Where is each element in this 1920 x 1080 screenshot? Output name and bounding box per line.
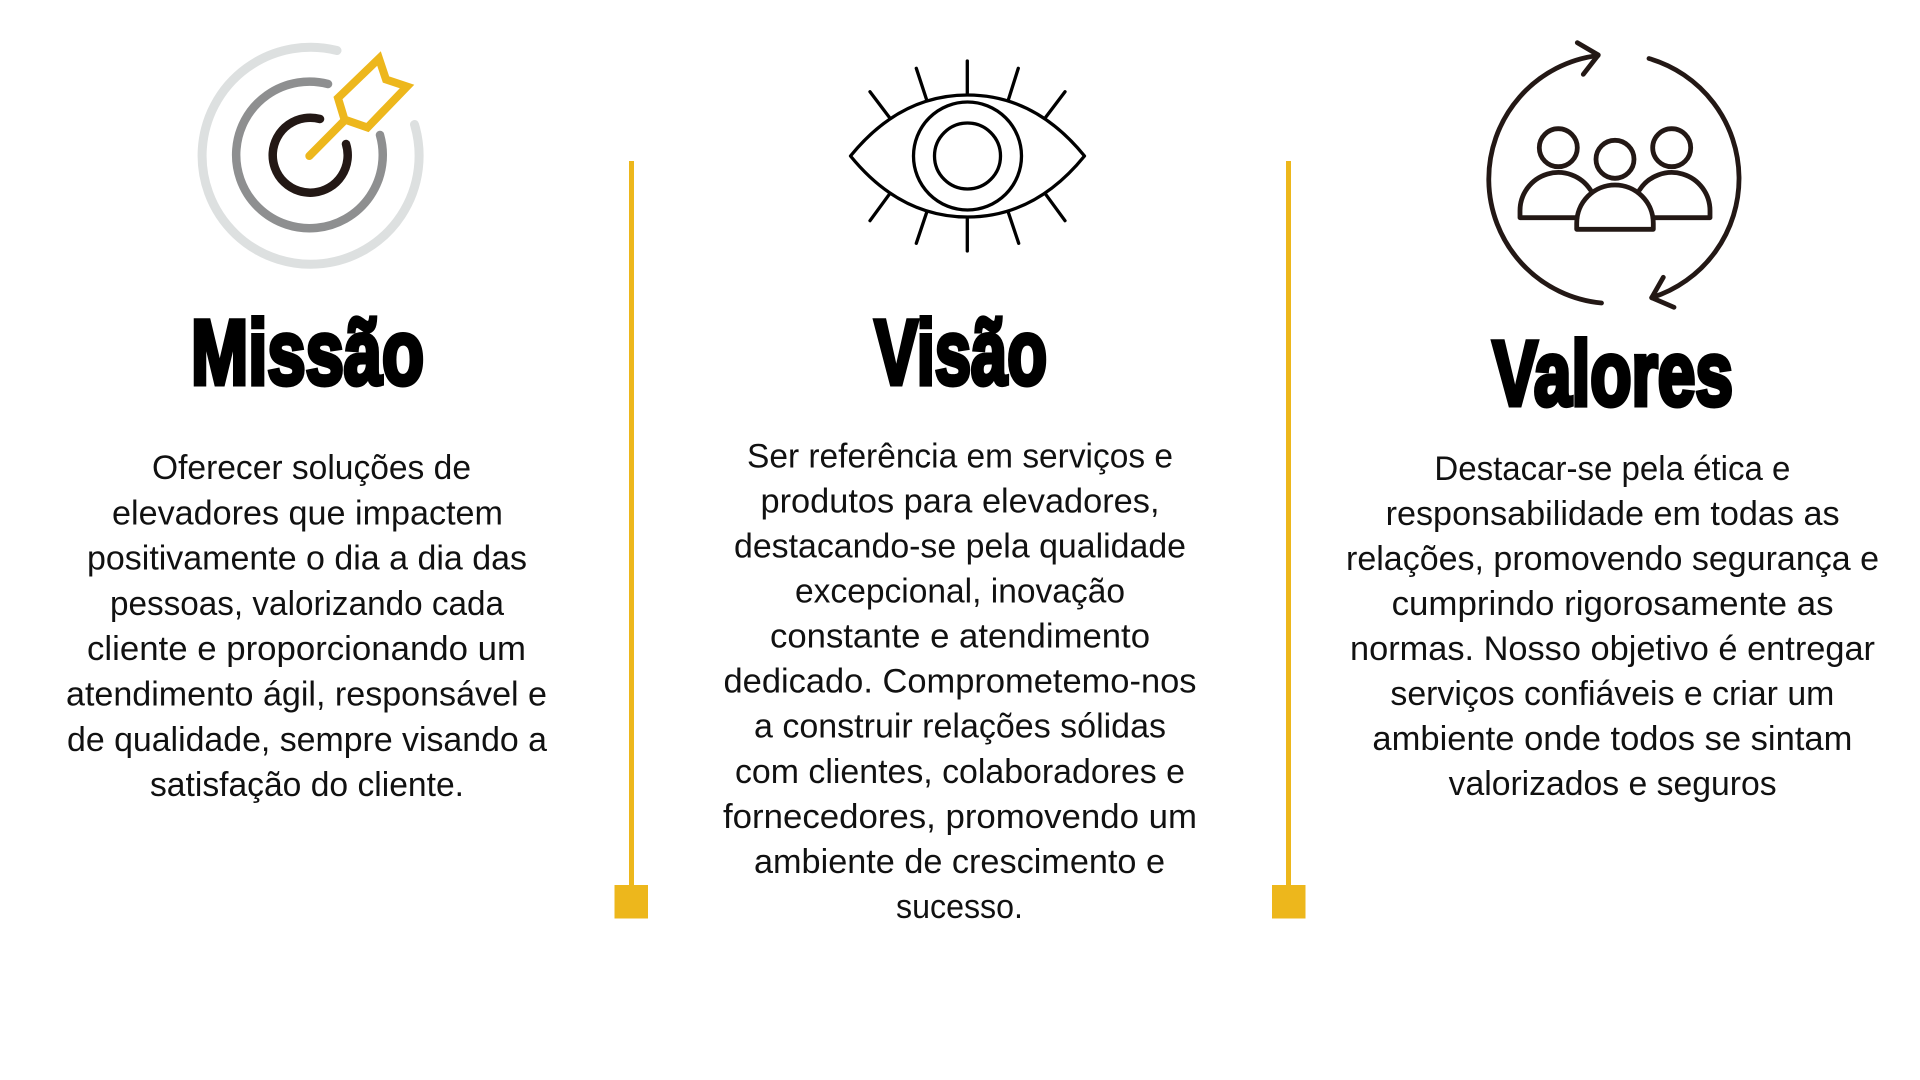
text block: Missão description: de qualidade, sempre visando a [67, 721, 547, 759]
icon: team with cycle arrows [1489, 43, 1739, 307]
text block: Missão description [66, 449, 547, 804]
text block: Valores description: serviços confiáveis e criar um [1390, 675, 1834, 713]
text block: Valores description: relações, promovendo segurança e [1346, 540, 1879, 578]
text block: Missão description: atendimento ágil, responsável e [66, 676, 547, 714]
panel: Missão [66, 47, 547, 804]
text block: Valores description: valorizados e seguros [1449, 765, 1777, 803]
heading: Visão: Visão [874, 302, 1047, 404]
divider: right line with square [1272, 161, 1306, 918]
text block: Visão description: destacando-se pela qualidade [734, 527, 1186, 565]
text block: Missão description: elevadores que impactem [112, 494, 503, 532]
heading: Valores: Valores [1492, 323, 1733, 425]
divider: left line with square [614, 161, 648, 918]
text block: Valores description: normas. Nosso objetivo é entregar [1350, 630, 1875, 668]
text block: Visão description: sucesso. [896, 888, 1023, 926]
text block: Visão description [723, 437, 1197, 926]
panel: Visão [723, 61, 1197, 926]
panel: Valores [1346, 43, 1879, 803]
text block: Visão description: a construir relações sólidas [754, 708, 1166, 746]
text block: Visão description: excepcional, inovação [795, 572, 1125, 610]
text block: Visão description: constante e atendimento [770, 618, 1150, 656]
text block: Visão description: produtos para elevadores, [760, 482, 1160, 520]
text block: Valores description: responsabilidade em todas as [1386, 495, 1840, 533]
text block: Missão description: positivamente o dia a dia das [87, 540, 527, 578]
text block: Missão description: Oferecer soluções de [152, 449, 471, 487]
text block: Missão description: cliente e proporcionando um [87, 630, 526, 668]
text block: Visão description: dedicado. Comprometemo-nos [724, 663, 1196, 701]
text block: Valores description: cumprindo rigorosamente as [1392, 585, 1834, 623]
heading: Missão: Missão [191, 302, 424, 404]
text block: Valores description [1346, 450, 1879, 803]
text block: Visão description: fornecedores, promovendo um [723, 798, 1197, 836]
text block: Valores description: Destacar-se pela ética e [1434, 450, 1790, 488]
text block: Visão description: ambiente de crescimento e [754, 843, 1165, 881]
text block: Valores description: ambiente onde todos se sintam [1372, 720, 1852, 758]
icon: target with dart [202, 47, 419, 264]
text block: Visão description: Ser referência em serviços e [747, 437, 1173, 475]
text block: Visão description: com clientes, colaboradores e [735, 753, 1185, 791]
icon: eye [850, 61, 1084, 251]
text block: Missão description: satisfação do cliente. [150, 766, 464, 804]
text block: Missão description: pessoas, valorizando cada [110, 585, 504, 623]
